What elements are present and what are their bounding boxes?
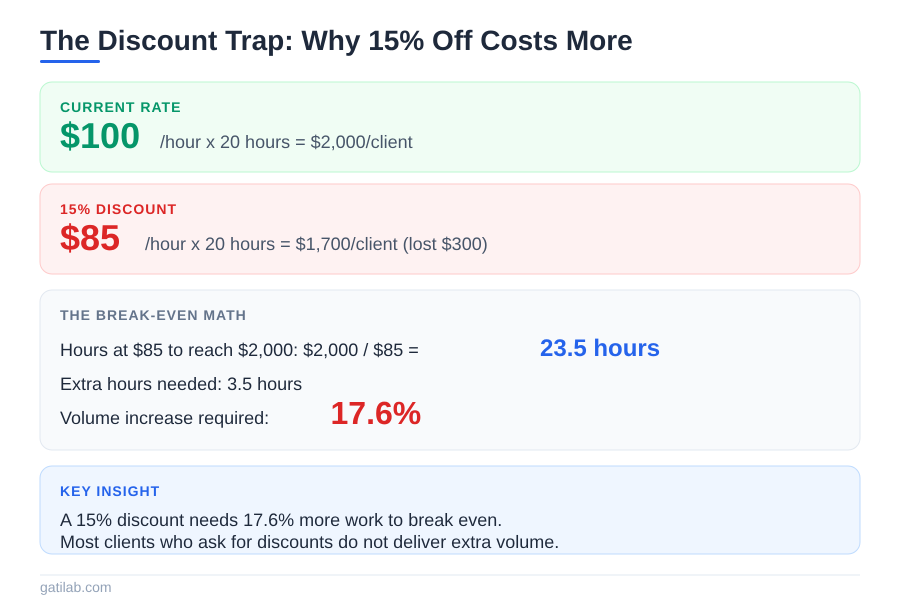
volume line: Volume increase required: xyxy=(60,408,269,428)
current rate value: $100 xyxy=(60,115,140,156)
panel: 15% discount xyxy=(40,184,860,274)
extra hours line: Extra hours needed: 3.5 hours xyxy=(60,374,302,394)
title: The Discount Trap: Why 15% Off Costs More xyxy=(40,25,633,56)
discount value: $85 xyxy=(60,217,120,258)
panel: break-even math xyxy=(40,290,860,450)
title underline accent xyxy=(40,60,100,63)
panel: key insight xyxy=(40,466,860,554)
footer rule xyxy=(40,574,860,576)
discount formula: /hour x 20 hours = $1,700/client (lost $300) xyxy=(145,234,488,254)
panel: current rate xyxy=(40,82,860,172)
current rate formula: /hour x 20 hours = $2,000/client xyxy=(160,132,413,152)
insight line 1: A 15% discount needs 17.6% more work to break even. xyxy=(60,510,502,530)
hours line: Hours at $85 to reach $2,000: $2,000 / $85 = xyxy=(60,340,419,360)
volume result: 17.6% xyxy=(330,395,421,431)
insight heading: KEY INSIGHT xyxy=(60,483,160,499)
current rate label: CURRENT RATE xyxy=(60,99,181,115)
hours result: 23.5 hours xyxy=(540,335,660,362)
break-even heading: THE BREAK-EVEN MATH xyxy=(60,307,247,323)
discount label: 15% DISCOUNT xyxy=(60,201,177,217)
footer source: gatilab.com xyxy=(40,579,112,595)
insight line 2: Most clients who ask for discounts do not deliver extra volume. xyxy=(60,532,559,552)
